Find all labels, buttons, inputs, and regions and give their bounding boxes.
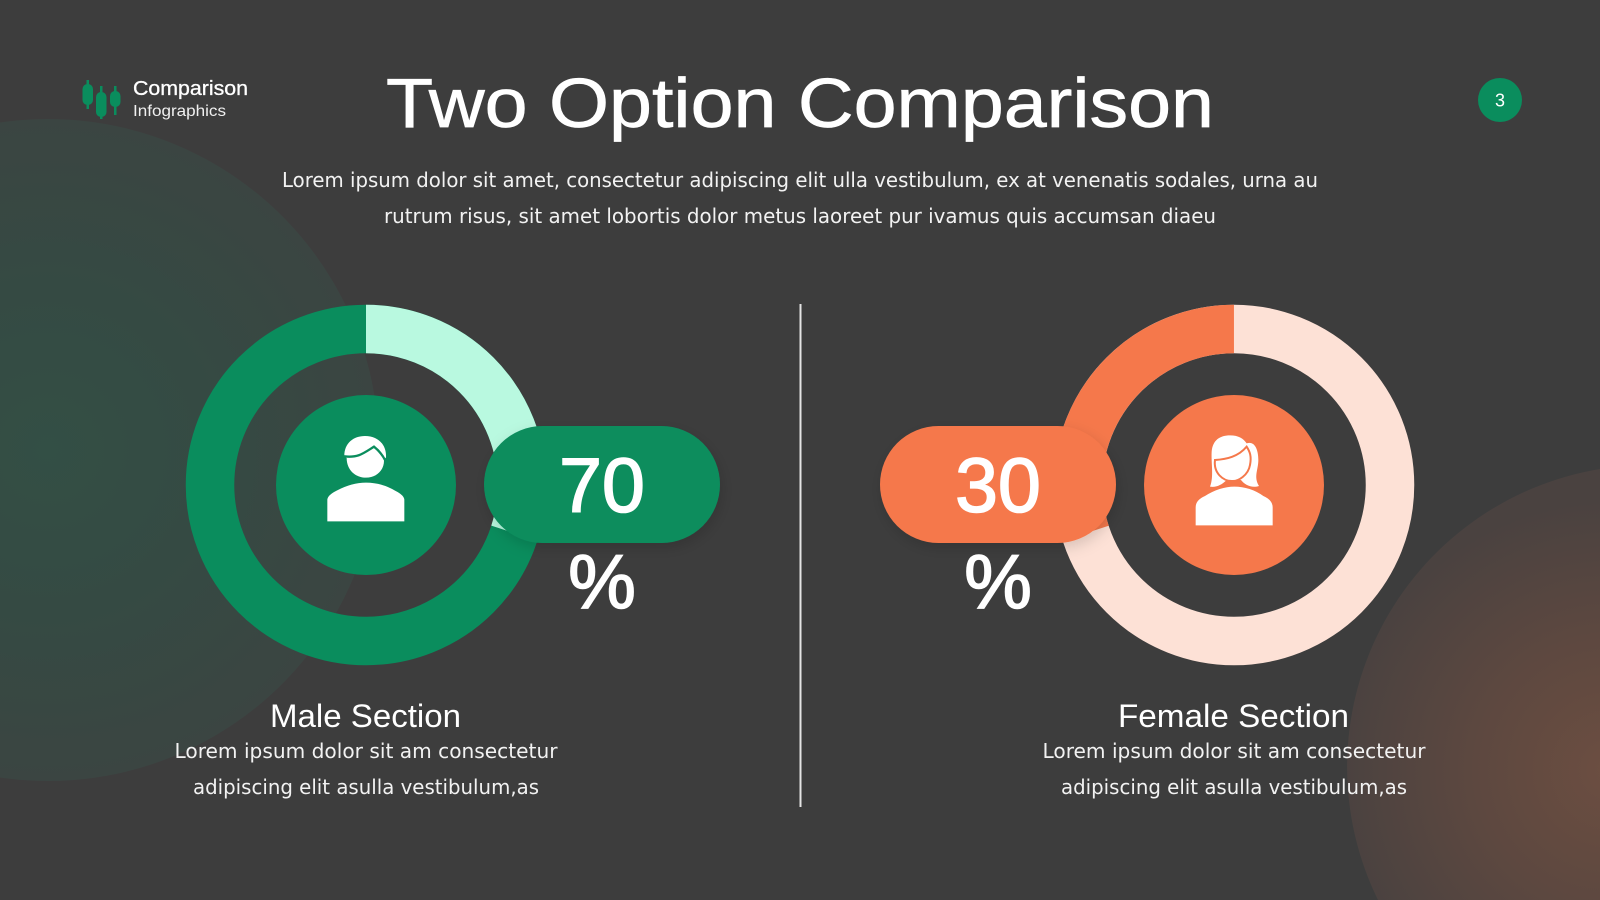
intro text bbox=[282, 168, 1318, 228]
intro text: Lorem ipsum dolor sit amet, consectetur adipiscing elit ulla vestibulum, ex at venenatis sodales, urna au bbox=[282, 168, 1318, 192]
value pill: 70 bbox=[484, 426, 720, 543]
female description: Lorem ipsum dolor sit am consectetur bbox=[1042, 739, 1426, 763]
value: 30: 30 bbox=[955, 443, 1041, 529]
male heading: Male Section bbox=[270, 698, 461, 734]
page number badge: 3 bbox=[1495, 90, 1505, 110]
logo subtitle: Infographics bbox=[133, 103, 226, 120]
female heading: Female Section bbox=[1118, 698, 1349, 734]
female description bbox=[1042, 739, 1426, 799]
page number badge bbox=[1478, 78, 1522, 122]
inner circle with female icon bbox=[1144, 395, 1324, 575]
intro text: rutrum risus, sit amet lobortis dolor metus laoreet pur ivamus quis accumsan diaeu bbox=[384, 204, 1216, 228]
inner circle with male icon bbox=[276, 395, 456, 575]
percent sign: % bbox=[568, 540, 636, 625]
logo title: Comparison bbox=[133, 78, 248, 100]
logo bbox=[82, 78, 248, 120]
male description: adipiscing elit asulla vestibulum,as bbox=[193, 775, 539, 799]
background circle: orange bbox=[1347, 469, 1600, 900]
male description: Lorem ipsum dolor sit am consectetur bbox=[174, 739, 558, 763]
background circle: green bbox=[0, 119, 379, 781]
female description: adipiscing elit asulla vestibulum,as bbox=[1061, 775, 1407, 799]
panel: female bbox=[880, 288, 1431, 799]
icon: candlesticks bbox=[82, 80, 120, 119]
panel: male bbox=[174, 329, 720, 799]
male description bbox=[174, 739, 558, 799]
percent sign: % bbox=[964, 540, 1032, 625]
value pill: 30 bbox=[880, 426, 1116, 543]
divider bbox=[800, 304, 802, 807]
value: 70: 70 bbox=[559, 443, 645, 529]
donut chart: female 30 percent bbox=[1037, 288, 1431, 682]
title: Two Option Comparison bbox=[386, 64, 1214, 142]
donut chart: male 70 percent bbox=[210, 329, 522, 641]
